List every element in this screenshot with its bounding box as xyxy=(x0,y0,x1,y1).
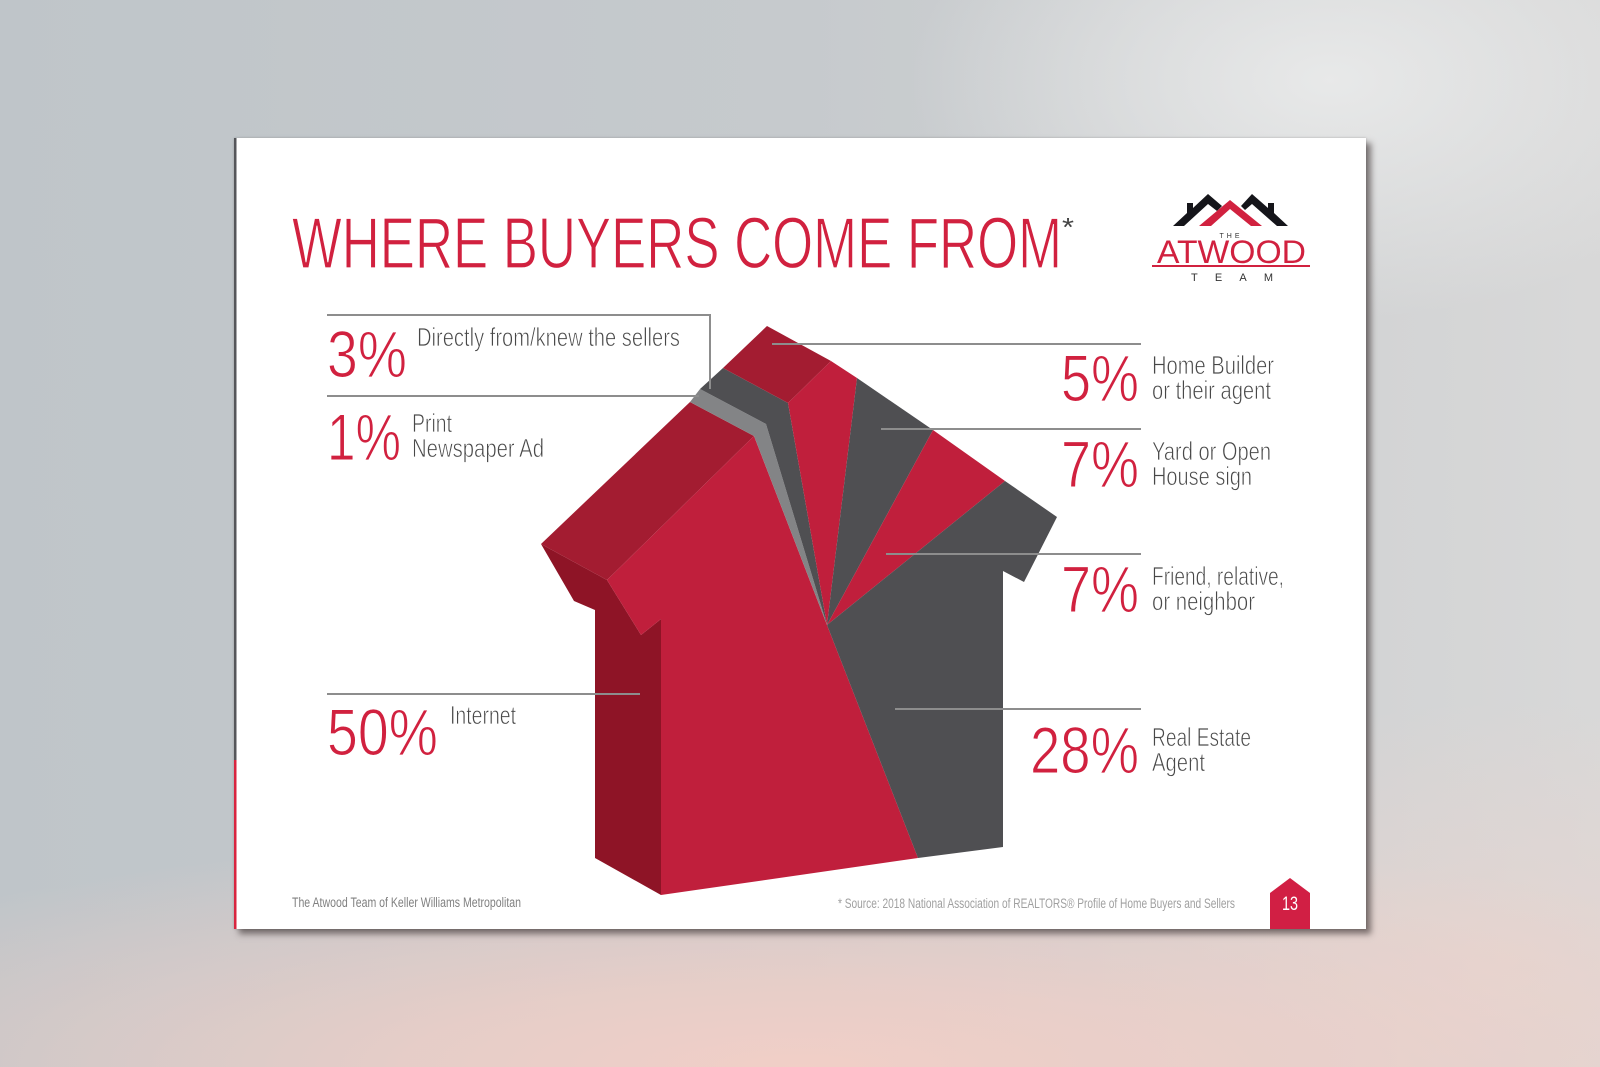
logo: The Atwood Team: ATWOOD xyxy=(1157,234,1306,270)
panel: white page xyxy=(234,138,1366,929)
slice: home builder roof facet xyxy=(723,326,831,403)
callout: 50% internet: Internet xyxy=(450,700,517,730)
slice: home builder 5% xyxy=(788,361,857,625)
callout: 7% friend, relative, or neighbor xyxy=(886,552,1284,626)
callout: 28% real estate agent xyxy=(895,709,1251,787)
callout: 5% home builder: 5% xyxy=(1061,341,1139,415)
callout: 50% internet xyxy=(327,694,640,769)
callout: 7% yard or open house sign: 7% xyxy=(1061,427,1139,501)
left page edge xyxy=(234,138,236,929)
slice: friend 7% xyxy=(827,430,1005,625)
callout: 7% friend, relative, or neighbor: Friend, relative, xyxy=(1152,561,1284,591)
footer: source note: * Source: 2018 National Association of REALTORS® Profile of Home Buyers and Sellers xyxy=(838,896,1235,911)
slice: print newspaper 1% xyxy=(690,389,827,625)
callout: 3% directly from sellers: Directly from/knew the sellers xyxy=(417,322,680,352)
callout: 5% home builder xyxy=(772,341,1274,415)
callout: 28% real estate agent: Real Estate xyxy=(1152,722,1251,752)
callout: 5% home builder: Home Builder xyxy=(1152,350,1274,380)
slice: real estate agent 28% xyxy=(827,481,1057,858)
callout: 7% yard or open house sign xyxy=(881,427,1271,501)
callout: 1% print newspaper ad: 1% xyxy=(327,400,401,474)
callout: 5% home builder: or their agent xyxy=(1152,375,1272,405)
slice: internet 50% xyxy=(607,436,918,895)
callout: 1% print newspaper ad: Print xyxy=(412,408,453,438)
callout: 50% internet: 50% xyxy=(327,695,438,769)
callout: 3% directly from sellers: 3% xyxy=(327,317,407,391)
callout: 7% friend, relative, or neighbor: or neighbor xyxy=(1152,586,1255,616)
callout: 7% friend, relative, or neighbor: 7% xyxy=(1061,552,1139,626)
page number badge xyxy=(1270,878,1310,929)
slice: yard sign 7% xyxy=(827,378,933,625)
slice: internet roof facet xyxy=(541,402,754,580)
footer: team name: The Atwood Team of Keller Williams Metropolitan xyxy=(292,895,521,910)
page number badge: 13 xyxy=(1282,894,1298,915)
slice: directly from sellers 3% xyxy=(700,368,827,625)
logo: The Atwood Team: TEAM xyxy=(1191,272,1273,284)
callout: 7% yard or open house sign: House sign xyxy=(1152,461,1252,491)
title: WHERE BUYERS COME FROM xyxy=(292,204,1062,284)
logo: The Atwood Team: THE xyxy=(1220,233,1242,240)
callout: 1% print newspaper ad: Newspaper Ad xyxy=(412,433,544,463)
chart: house-shaped pie xyxy=(541,326,1057,895)
callout: 7% yard or open house sign: Yard or Open xyxy=(1152,436,1271,466)
callout: 28% real estate agent: 28% xyxy=(1030,713,1139,787)
title: * xyxy=(1062,212,1074,242)
logo: The Atwood Team xyxy=(1152,194,1310,284)
callout: 28% real estate agent: Agent xyxy=(1152,747,1206,777)
callout: 1% print newspaper ad xyxy=(327,396,699,474)
callout: 3% directly from sellers xyxy=(327,315,710,391)
slice: internet side wall xyxy=(541,544,661,895)
